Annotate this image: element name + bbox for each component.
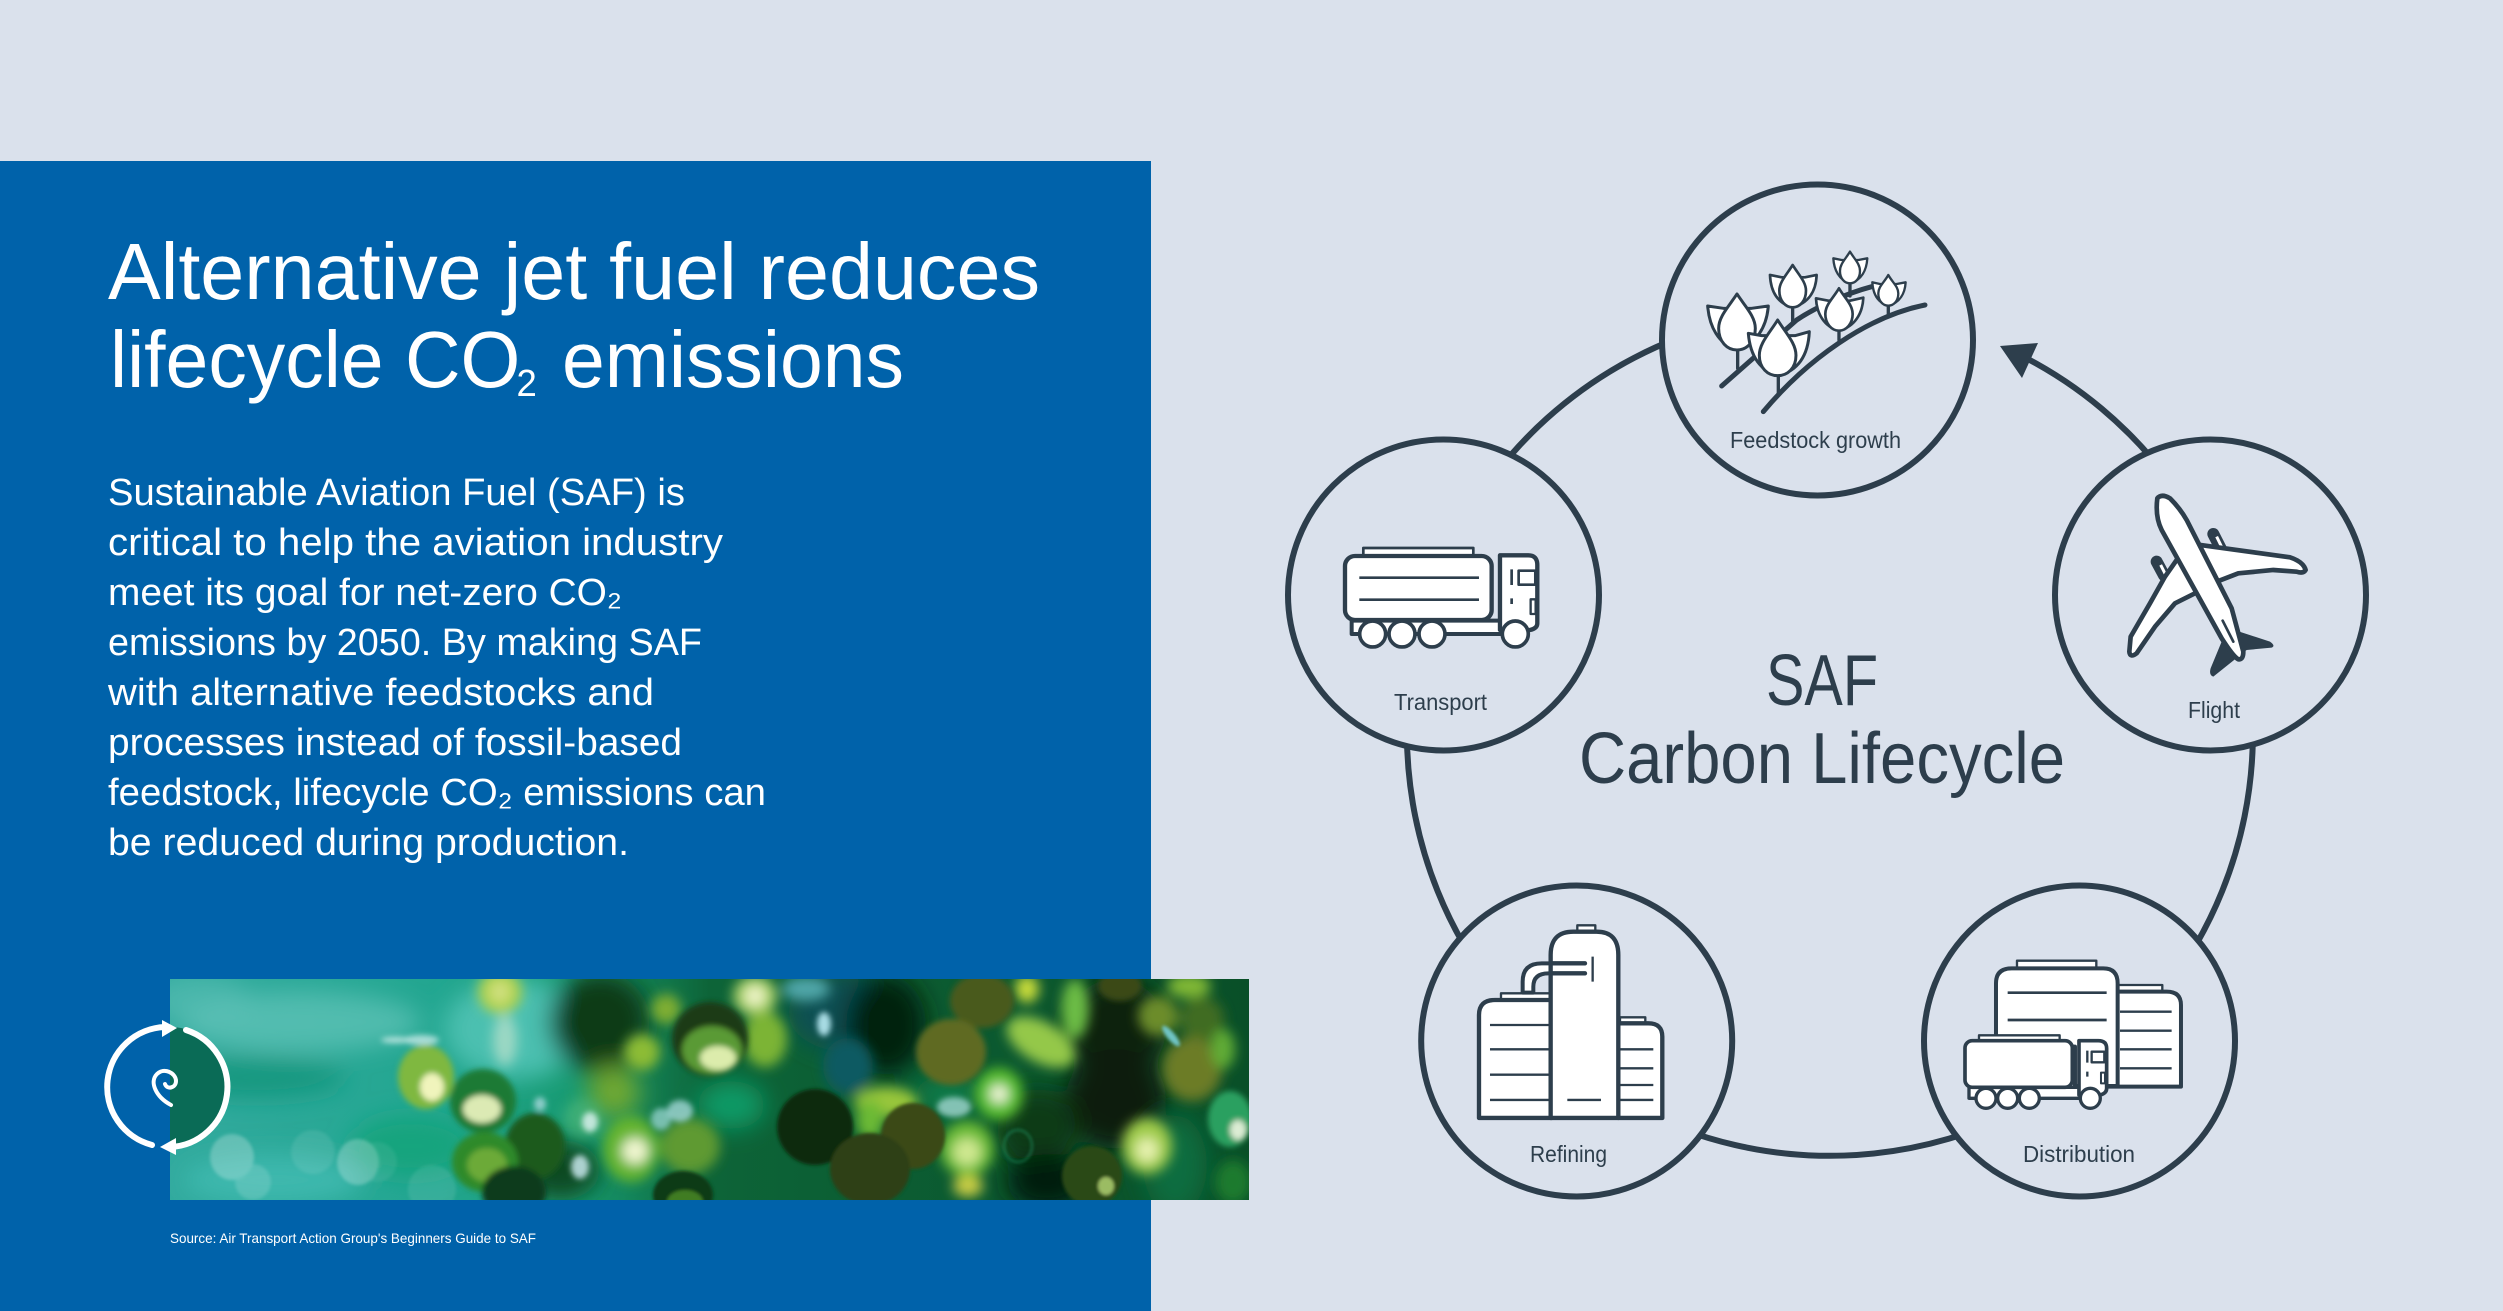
icon: tanker truck xyxy=(1345,548,1537,647)
center heading xyxy=(1579,641,2065,799)
body text: meet its goal for net-zero CO₂ xyxy=(108,572,622,614)
title: 2 xyxy=(516,363,537,405)
node: feedstock growth xyxy=(1662,184,1973,496)
node: transport: Transport xyxy=(1394,689,1488,715)
source note: Source: Air Transport Action Group's Beginners Guide to SAF xyxy=(170,1230,536,1246)
icon: airplane xyxy=(2129,496,2306,677)
node: feedstock growth: Feedstock growth xyxy=(1730,427,1901,453)
node: refining xyxy=(1421,886,1732,1196)
title: emissions xyxy=(541,315,904,404)
icon: storage tanks and truck xyxy=(1965,961,2181,1108)
lifecycle ring with arrow xyxy=(1407,310,2253,1156)
title: Alternative jet fuel reduces xyxy=(108,227,1040,316)
center heading: Carbon Lifecycle xyxy=(1579,719,2065,799)
icon: refinery xyxy=(1479,925,1662,1118)
title: lifecycle CO xyxy=(110,315,537,404)
node: flight: Flight xyxy=(2188,697,2241,723)
node: distribution: Distribution xyxy=(2023,1141,2135,1167)
body text: critical to help the aviation industry xyxy=(108,522,723,564)
body text xyxy=(107,472,766,864)
icon: lifecycle loop xyxy=(107,1020,230,1155)
node: distribution xyxy=(1924,886,2235,1196)
body text: Sustainable Aviation Fuel (SAF) is xyxy=(108,472,685,514)
title xyxy=(108,227,1040,405)
node: flight xyxy=(2055,440,2366,750)
icon: feedstock plants xyxy=(1708,252,1925,412)
panel: blue text panel xyxy=(0,161,1151,1311)
body text: processes instead of fossil-based xyxy=(108,722,682,764)
body text: feedstock, lifecycle CO₂ emissions can xyxy=(108,772,766,814)
node: transport xyxy=(1288,440,1599,750)
body text: emissions by 2050. By making SAF xyxy=(108,622,702,664)
body text: with alternative feedstocks and xyxy=(107,672,654,714)
photo: algae close-up xyxy=(170,979,1249,1200)
body text: be reduced during production. xyxy=(108,822,629,864)
center heading: SAF xyxy=(1766,641,1878,721)
node: refining: Refining xyxy=(1530,1141,1607,1167)
